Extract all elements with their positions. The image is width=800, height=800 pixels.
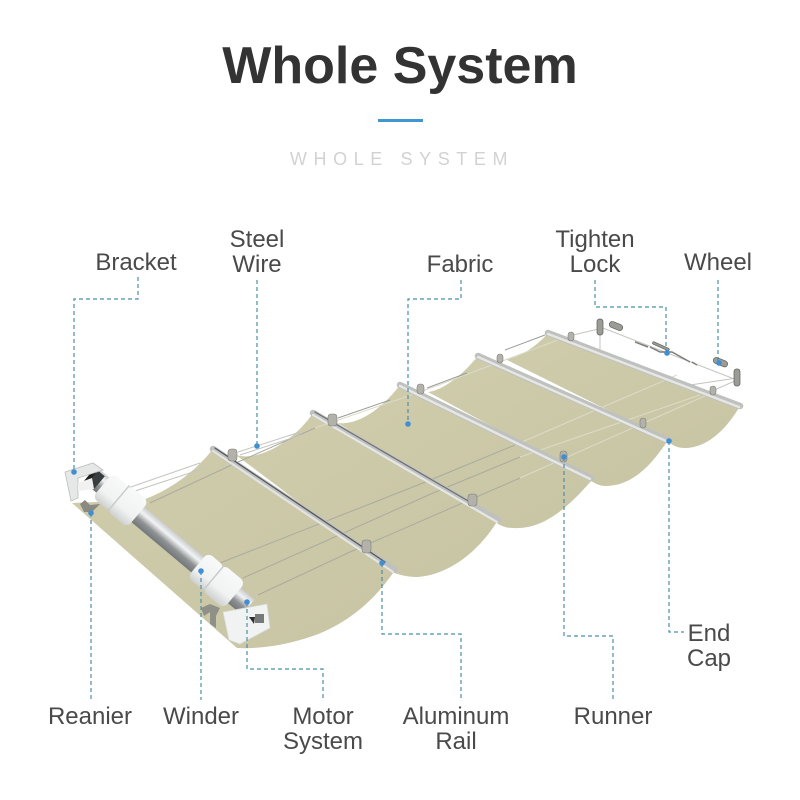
label: Aluminum Rail: Rail xyxy=(435,728,477,755)
motor end cap xyxy=(201,604,270,644)
left bracket xyxy=(65,463,103,512)
winder right xyxy=(187,552,245,609)
leader lines xyxy=(74,277,718,700)
subtitle: WHOLE SYSTEM xyxy=(290,149,514,169)
label: Tighten Lock: Lock xyxy=(570,251,621,278)
label: Wheel: Wheel xyxy=(684,249,752,276)
title: Whole System xyxy=(222,37,578,95)
label: End Cap: End xyxy=(688,620,730,647)
label: Bracket: Bracket xyxy=(95,249,177,276)
aluminum rails xyxy=(213,333,740,572)
shade system illustration xyxy=(65,319,740,648)
reel tube xyxy=(79,461,259,620)
label: Motor System: System xyxy=(283,728,363,755)
wires xyxy=(128,328,737,595)
label: Aluminum Rail: Aluminum xyxy=(403,703,509,730)
label: Fabric: Fabric xyxy=(427,251,493,278)
winder left xyxy=(92,472,149,528)
label: Reanier: Reanier xyxy=(48,703,132,730)
fabric panels xyxy=(72,333,740,648)
label: Winder: Winder xyxy=(163,703,239,730)
runners xyxy=(228,332,716,553)
accent bar xyxy=(378,119,423,122)
label: Motor System: Motor xyxy=(292,703,354,730)
label: Steel Wire: Wire xyxy=(232,251,282,278)
wheels and tighten lock xyxy=(597,319,740,386)
label: End Cap: Cap xyxy=(687,645,731,672)
label: Steel Wire: Steel xyxy=(230,226,284,253)
marker dots xyxy=(71,350,722,605)
label: Tighten Lock: Tighten xyxy=(555,226,635,253)
label: Runner: Runner xyxy=(574,703,652,730)
